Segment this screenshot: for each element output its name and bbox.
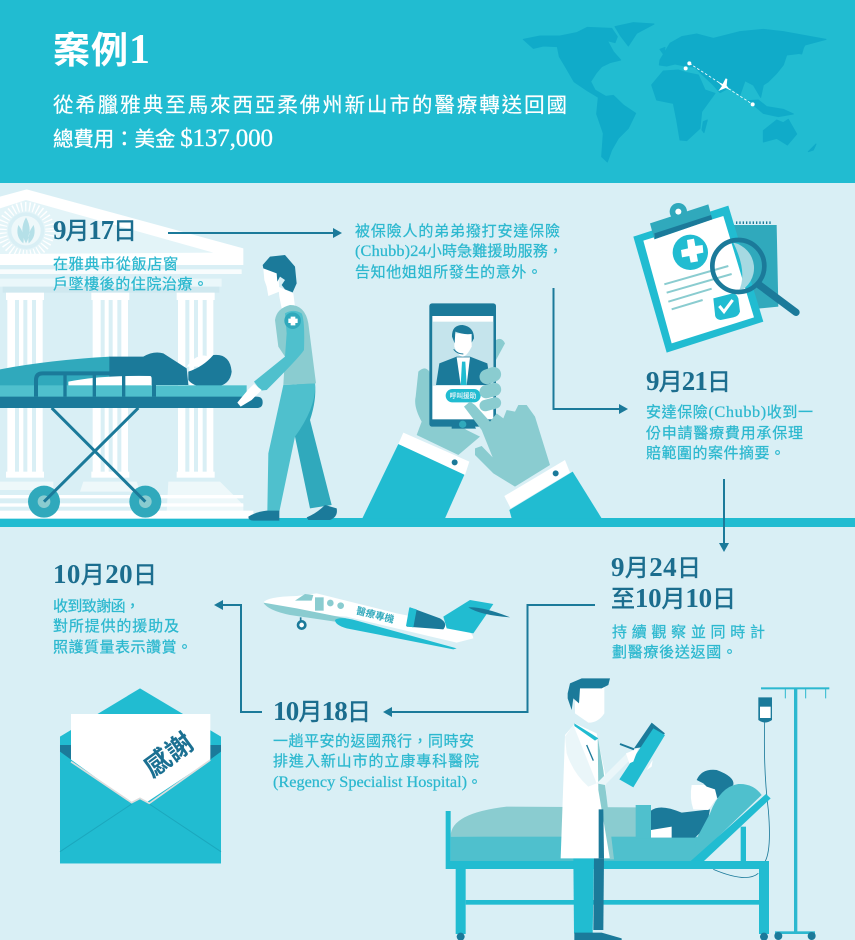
text block: Oct 18: 10月18日 xyxy=(273,696,371,726)
text block: brother's call xyxy=(355,223,563,281)
text block: Oct 20: 10月20日 xyxy=(53,559,157,589)
call button label: 呼叫援助 xyxy=(450,391,477,400)
illustration: medical jet xyxy=(263,593,510,649)
text block: Sept 21: 份申請醫療費用承保理 xyxy=(646,425,803,442)
fuselage label: 醫療專機 xyxy=(355,605,396,626)
text block: Sept 17: 在雅典市從飯店窗 xyxy=(53,256,178,273)
text block: Oct 18: (Regency Specialist Hospital)。 xyxy=(273,772,482,791)
text block: Sept 17 xyxy=(53,215,208,293)
section band xyxy=(0,518,855,527)
text block: Sept 24 to Oct 10 xyxy=(611,552,765,661)
text block: Sept 24 to Oct 10: 至10月10日 xyxy=(611,583,736,613)
thanks label: 感謝 xyxy=(134,722,200,785)
world map xyxy=(523,23,826,162)
text block: Sept 21 xyxy=(646,366,813,462)
text block: Sept 21: 賠範圍的案件摘要。 xyxy=(646,444,785,462)
text block: Sept 24 to Oct 10: 持續觀察並同時計 xyxy=(612,623,765,641)
arrow: 10/18 to 10/20 xyxy=(214,600,262,712)
text block: brother's call: 告知他姐姐所發生的意外。 xyxy=(355,263,542,281)
text block: Sept 21: 9月21日 xyxy=(646,366,731,396)
text block: Sept 24 to Oct 10: 9月24日 xyxy=(611,552,701,582)
flight route xyxy=(684,61,755,106)
text block: Oct 18: 排進入新山市的立康專科醫院 xyxy=(273,752,479,770)
subtitle: 從希臘雅典至馬來西亞柔佛州新山市的醫療轉送回國 xyxy=(53,94,567,117)
text block: Oct 20: 照護質量表示讚賞。 xyxy=(53,638,192,656)
text block: Oct 18 xyxy=(273,696,482,791)
text block: Sept 17: 戶墜樓後的住院治療。 xyxy=(53,275,208,293)
text block: Sept 21: 安達保險(Chubb)收到一 xyxy=(646,402,813,421)
text block: brother's call: (Chubb)24小時急難援助服務， xyxy=(355,241,563,260)
title: 案例1 xyxy=(53,27,150,73)
illustration: phone call xyxy=(362,303,602,518)
text block: Oct 20: 收到致謝函， xyxy=(53,598,140,615)
illustration: hospital bed with doctor and IV xyxy=(446,678,829,940)
arrow: call to 9/21 xyxy=(554,288,628,414)
illustration: nurse xyxy=(237,255,337,521)
total cost: 總費用：美金 $137,000 xyxy=(53,125,273,152)
illustration: clipboard and magnifier xyxy=(633,203,796,353)
text block: brother's call: 被保險人的弟弟撥打安達保險 xyxy=(355,223,560,240)
text block: Sept 17: 9月17日 xyxy=(53,215,137,245)
illustration: stretcher with patient xyxy=(0,353,263,518)
panel: header banner xyxy=(0,0,855,183)
arrow: 9/21 to 9/24 xyxy=(719,479,729,552)
illustration: temple xyxy=(0,189,253,519)
arrow: 9/17 to brother's call xyxy=(168,228,342,238)
text block: Oct 20 xyxy=(53,559,192,656)
illustration: thank-you envelope xyxy=(60,688,221,863)
text block: Oct 20: 對所提供的援助及 xyxy=(53,618,179,635)
arrow: 9/24 to 10/18 xyxy=(383,605,595,717)
text block: Oct 18: 一趟平安的返國飛行，同時安 xyxy=(273,733,474,750)
text block: Sept 24 to Oct 10: 劃醫療後送返國。 xyxy=(612,644,737,661)
